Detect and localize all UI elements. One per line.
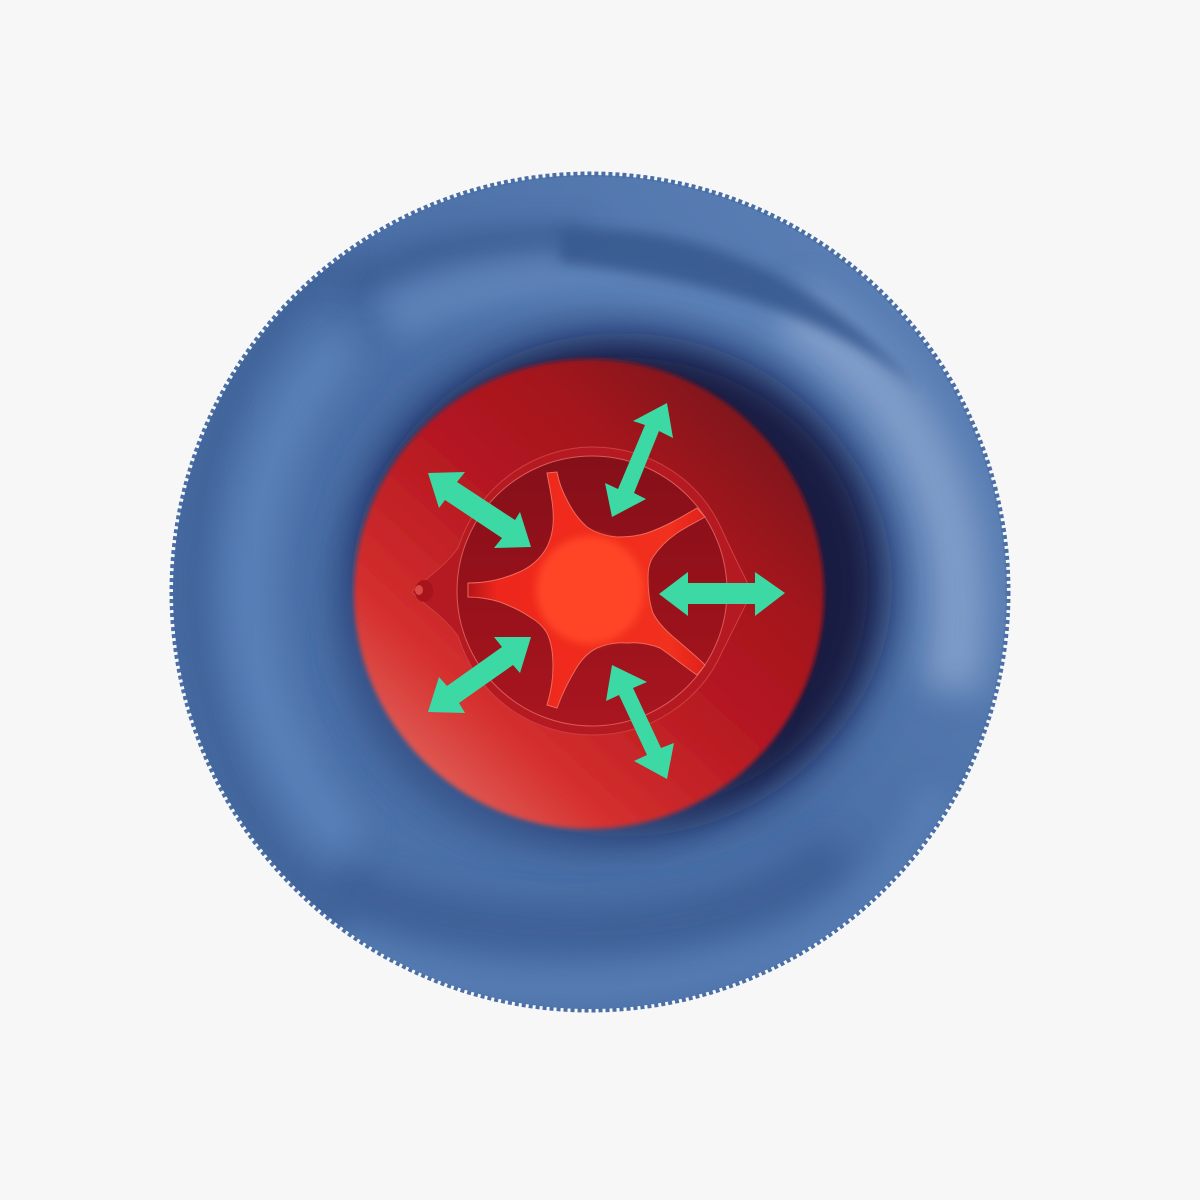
arrow: lower left [428, 637, 531, 713]
core glow [536, 536, 644, 644]
red dome [354, 359, 824, 829]
groove top [340, 240, 590, 290]
illustration: blue ring with red core [170, 172, 1010, 1012]
outer groove left [190, 250, 340, 925]
blue ring [172, 174, 1008, 1010]
crease upper right [560, 229, 917, 387]
nub at left point [415, 580, 433, 602]
star opening [468, 472, 705, 708]
dark shadow around red dome [337, 327, 893, 843]
light lower band [340, 790, 940, 989]
light upper right band [790, 310, 958, 690]
light top band [386, 252, 763, 334]
groove bottom [330, 850, 840, 929]
arrow: right [659, 572, 785, 616]
arrow: upper right [605, 403, 673, 517]
arrow: upper left [428, 472, 531, 548]
arrow: lower right [606, 665, 674, 779]
recessed well [457, 456, 727, 726]
light left band [250, 340, 350, 845]
well lip [412, 447, 752, 735]
